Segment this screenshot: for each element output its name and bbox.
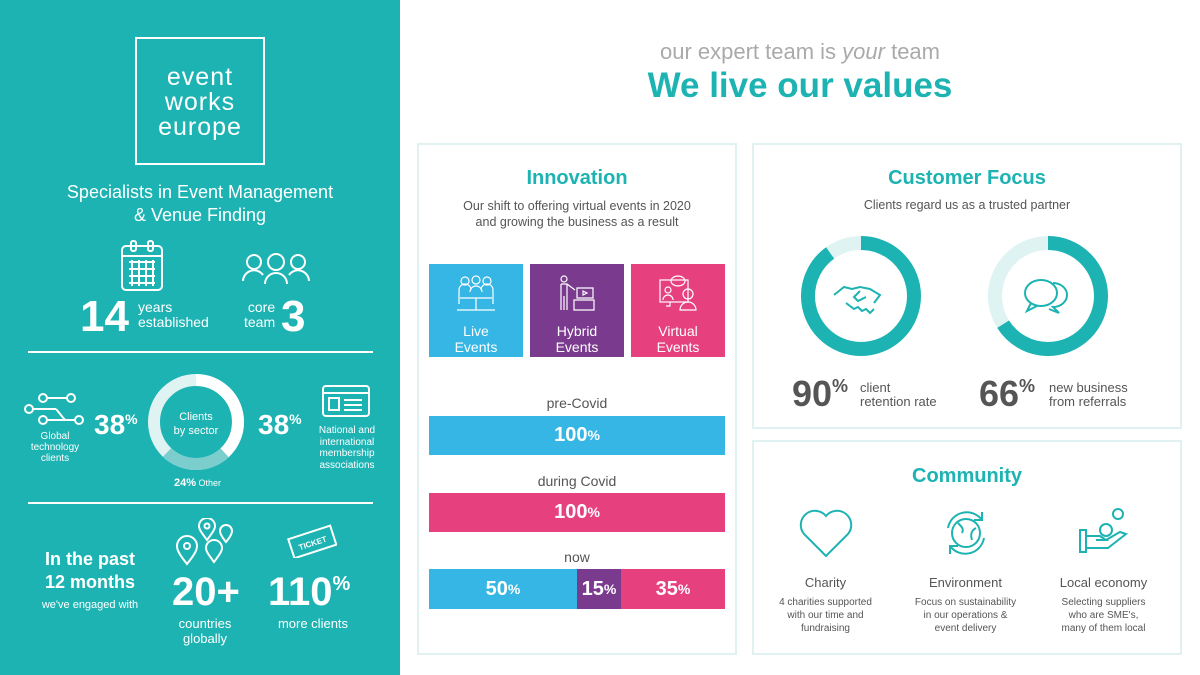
text: past 12 months [45,549,135,592]
panel: innovation [417,143,737,655]
panel: innovation: 15% [582,578,616,600]
item: local economy [1060,508,1148,634]
tile: live: Live [463,323,489,339]
icon: ticket [287,524,337,558]
panel: customer focus: from referrals [1049,394,1126,409]
icon: ticket: TICKET [298,535,328,552]
tagline: Specialists in Event Management [67,182,333,202]
item: environment [915,511,1016,634]
item: environment: Focus on sustainability [915,597,1016,608]
item: local economy: Selecting suppliers [1062,597,1145,608]
panel: innovation: 50% [486,578,520,600]
item: charity: 4 charities supported [779,597,872,608]
item: local economy: many of them local [1062,623,1145,634]
donut: clients by sector: by sector [174,425,219,437]
text: past 12 months: In the past [45,549,135,569]
panel: community: Community [912,465,1022,487]
icon: pins [176,518,233,566]
logo [135,37,265,165]
icon: team [242,253,310,284]
item: charity: with our time and [787,610,864,621]
item: charity: fundraising [801,623,850,634]
panel: customer focus: new business [1049,380,1128,395]
donut: clients by sector: Clients [179,411,213,423]
left panel: established [138,314,209,330]
left panel: more clients [278,616,348,631]
item: local economy: who are SME's, [1069,610,1138,621]
stat 38% left: 38% [94,409,138,440]
logo: works [165,88,235,116]
icon: id card [322,385,370,417]
panel: innovation: 35% [656,578,690,600]
panel: innovation: and growing the business as a result [476,215,678,229]
left panel: years [138,299,172,315]
donut: clients by sector [148,374,244,470]
label: associations: National and international membership associations [319,425,375,470]
tagline [67,182,333,225]
logo: event [167,63,233,91]
left panel: we've engaged with [42,599,138,611]
stat: core team 3: team [244,314,275,330]
item: local economy: Local economy [1060,575,1147,590]
heading: Innovation [526,167,628,189]
stat: 110%: 110% [268,570,350,614]
title: We live our values [648,66,952,105]
icon: network [24,393,84,425]
stat: core team 3 [244,299,275,330]
donut: 66% [988,236,1108,356]
tile: hybrid: Hybrid [557,323,597,339]
bar: during covid: during Covid [538,473,616,489]
item: charity [779,510,872,634]
stat 38% right: 38% [258,409,302,440]
item: environment: in our operations & [924,610,1007,621]
stat: 20+: 20+ [172,570,240,614]
tile: virtual: Events [657,339,699,355]
tile: virtual [631,264,725,357]
panel: community [752,440,1182,655]
donut: 90% [801,236,921,356]
panel: customer focus [752,143,1182,429]
left panel: countries [179,616,231,631]
left panel [0,0,400,675]
label: global tech: Global technology clients [31,431,79,464]
tile: live: Events [455,339,497,355]
tile: hybrid [530,264,624,357]
panel: customer focus: Clients regard us as a trusted partner [864,198,1070,212]
panel: innovation: 100% [554,501,600,523]
item: environment: Environment [929,575,1002,590]
panel: innovation: Our shift to offering virtual events in 2020 [463,199,691,213]
tile: live [429,264,523,357]
icon: calendar [121,240,163,291]
logo: europe [158,113,242,141]
label 24% other: 24% Other [174,477,221,489]
panel: customer focus: retention rate [860,394,937,409]
panel: customer focus: Customer Focus [888,167,1046,189]
item: environment: event delivery [935,623,996,634]
stat: core team 3: core [248,299,275,315]
bar: pre-covid: pre-Covid [547,395,607,411]
left panel: 3 [281,292,305,341]
stat: 66%: 66% [979,373,1035,414]
item: charity: Charity [805,575,846,590]
stat: 90%: 90% [792,373,848,414]
bar: now: now [564,549,590,565]
tile: hybrid: Events [556,339,598,355]
stat: 14 years: 14 [80,292,129,341]
tile: virtual: Virtual [658,323,698,339]
panel: customer focus: client [860,380,890,395]
left panel: globally [183,631,227,646]
subtitle: our expert team is your team [660,39,940,64]
text: past 12 months: 12 months [45,572,135,592]
tagline: & Venue Finding [134,205,266,225]
panel: innovation: 100% [554,424,600,446]
